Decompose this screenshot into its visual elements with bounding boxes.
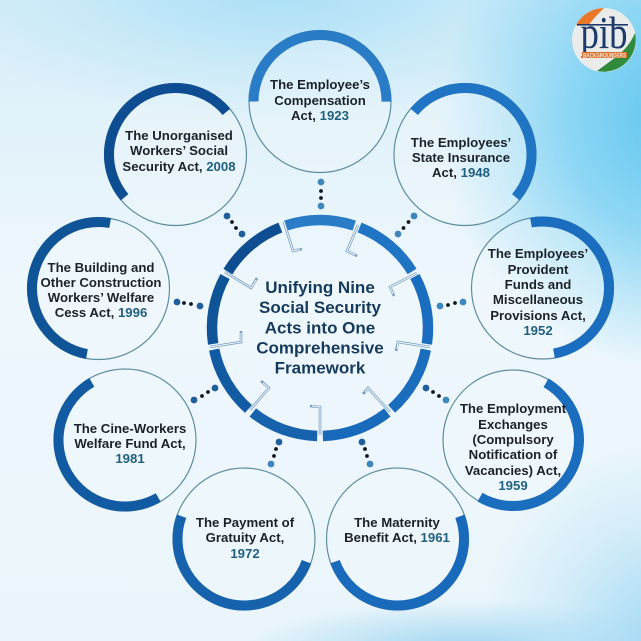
circle: Employment Exchanges Act: Exchanges [478, 417, 548, 432]
central heading: Framework [275, 358, 366, 378]
circle: Employment Exchanges Act: 1959 [498, 478, 528, 493]
circle: Employee's Compensation Act [249, 30, 391, 172]
circle: Provident Funds Act [465, 211, 620, 365]
circle: Unorganised Workers Act: Security Act, 2008 [122, 159, 236, 174]
central heading: Comprehensive [256, 338, 384, 358]
circle: Unorganised Workers Act: Workers’ Social [130, 143, 228, 158]
central heading [256, 278, 384, 378]
central heading: Acts into One [265, 318, 375, 338]
circle: Building and Construction Workers Act: Cess Act, 1996 [55, 305, 147, 320]
circle: Cine-Workers Welfare Fund Act: The Cine-Workers [74, 421, 186, 436]
circle: State Insurance Act: State Insurance [412, 150, 510, 165]
circle: Provident Funds Act: Miscellaneous [493, 292, 583, 307]
circle: Cine-Workers Welfare Fund Act [34, 349, 216, 531]
central heading: Social Security [259, 298, 381, 317]
circle: Cine-Workers Welfare Fund Act: 1981 [115, 451, 145, 466]
circle: Employment Exchanges Act: The Employment [460, 401, 567, 416]
circle: Payment of Gratuity Act: Gratuity Act, [206, 530, 284, 545]
circle: Employee's Compensation Act: Compensation [274, 93, 366, 108]
circle: State Insurance Act: The Employees’ [411, 135, 511, 150]
circle: Employee's Compensation Act: Act, 1923 [291, 108, 349, 123]
central ring [168, 176, 472, 480]
dotted links [174, 179, 466, 467]
circle: Unorganised Workers Act [82, 61, 269, 248]
circle: Provident Funds Act: The Employees’ [488, 246, 588, 261]
circle: Building and Construction Workers Act: Other Construction [41, 275, 161, 290]
circle: Employment Exchanges Act: Vacancies) Act, [465, 463, 561, 478]
circle: Cine-Workers Welfare Fund Act: Welfare Fund Act, [74, 436, 186, 451]
logo: PIB Backgrounders [572, 7, 636, 72]
circle: Maternity Benefit Act: Benefit Act, 1961 [344, 530, 450, 545]
circle: Payment of Gratuity Act [159, 454, 329, 624]
circle: Employment Exchanges Act [423, 350, 603, 530]
circle: Provident Funds Act: Provisions Act, [490, 308, 586, 323]
circle: Maternity Benefit Act: The Maternity [354, 515, 441, 530]
circle: Maternity Benefit Act [312, 454, 483, 624]
circle: Provident Funds Act: Funds and [505, 277, 571, 292]
logo: PIB Backgrounders: BACKGROUNDERS [583, 54, 626, 60]
circle: Employment Exchanges Act: Notification of [469, 447, 558, 462]
circle: Provident Funds Act: Provident [508, 262, 569, 277]
circle: Payment of Gratuity Act: 1972 [230, 546, 260, 561]
circle: State Insurance Act [371, 61, 559, 248]
central heading: Unifying Nine [265, 278, 375, 297]
circle: Employee's Compensation Act: The Employee’s [270, 77, 370, 92]
circle: Building and Construction Workers Act: Workers’ Welfare [48, 290, 154, 305]
circle: Unorganised Workers Act: The Unorganised [125, 128, 233, 143]
circle: Building and Construction Workers Act: The Building and [48, 260, 154, 275]
circle: Employment Exchanges Act: (Compulsory [472, 432, 554, 447]
logo: PIB Backgrounders: pib [580, 7, 628, 58]
ring connectors [210, 222, 430, 435]
circle: State Insurance Act: Act, 1948 [432, 165, 490, 180]
circle: Provident Funds Act: 1952 [523, 323, 553, 338]
circle: Payment of Gratuity Act: The Payment of [196, 515, 295, 530]
circle: Building and Construction Workers Act [21, 211, 176, 366]
